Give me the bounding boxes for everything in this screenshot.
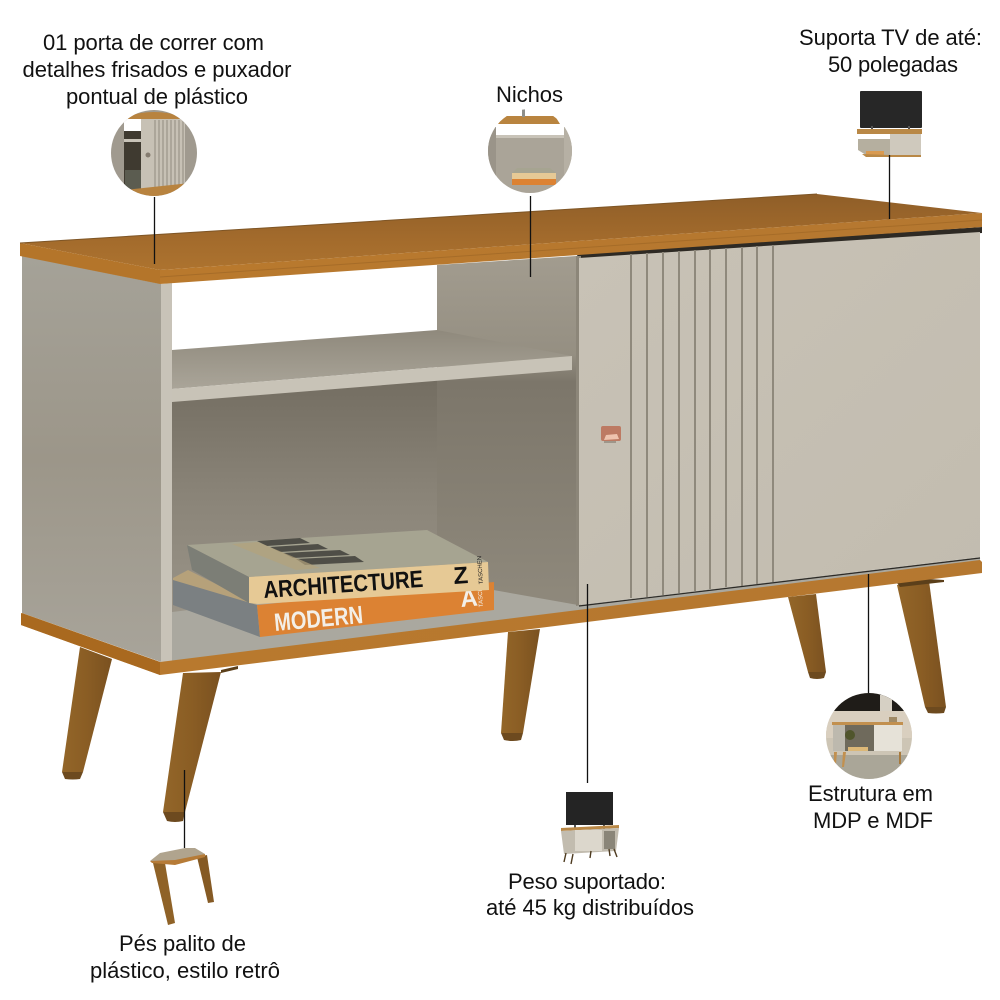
thumbnail: room scene [826,693,912,779]
body text: até 45 kg distribuídos [486,895,694,920]
thumbnail: door [111,110,197,196]
lower book: MODERN [273,601,364,637]
connector line [154,197,156,264]
body text: Estrutura em [808,781,933,806]
callout: nichos [488,82,572,277]
door [576,227,982,606]
upper book [187,530,489,604]
shelf [172,330,572,402]
left side panel [22,256,161,662]
upper book: Z [453,562,469,590]
thumbnail: TV and stand [561,792,619,864]
back legs [501,581,946,741]
heading text: 50 polegadas [828,52,958,77]
connector line [888,155,890,219]
callout: pes palito [90,770,280,983]
callout: suporta TV [799,25,982,219]
inner right wall [437,256,576,606]
connector line [530,196,532,277]
base strip [21,560,982,675]
heading text: pontual de plástico [66,84,248,109]
upper book: ARCHITECTURE [263,566,424,604]
thumbnail: TV on stand [857,91,922,157]
cover title marks [257,538,364,565]
callout: porta de correr [22,30,292,264]
front legs [62,579,944,822]
furniture: TV stand [20,194,982,822]
lower book: TASCHEN [477,579,485,607]
heading text: Nichos [496,82,563,107]
lower book: A [459,585,479,613]
upper book: TASCHEN [477,556,485,584]
books [173,530,494,637]
body text: Pés palito de [119,931,246,956]
connector line [184,770,186,848]
wooden top [20,194,982,284]
connector line [868,574,870,693]
body text: Peso suportado: [508,869,666,894]
lower back wall [172,378,437,614]
thumbnail: niche [488,109,572,193]
callout: estrutura [808,574,933,833]
door grooves [631,245,773,598]
heading text: detalhes frisados e puxador [22,57,292,82]
thumbnail: leg detail [150,848,214,925]
callout: peso suportado [486,584,694,920]
body text: MDP e MDF [813,808,933,833]
front edge of side panel [161,283,172,662]
connector line [586,584,588,783]
door handle [601,426,621,443]
lower book [173,570,494,637]
heading text: Suporta TV de até: [799,25,982,50]
upper opening [172,265,437,350]
heading text: 01 porta de correr com [43,30,264,55]
floor of the cabinet [172,557,980,662]
body text: plástico, estilo retrô [90,958,280,983]
